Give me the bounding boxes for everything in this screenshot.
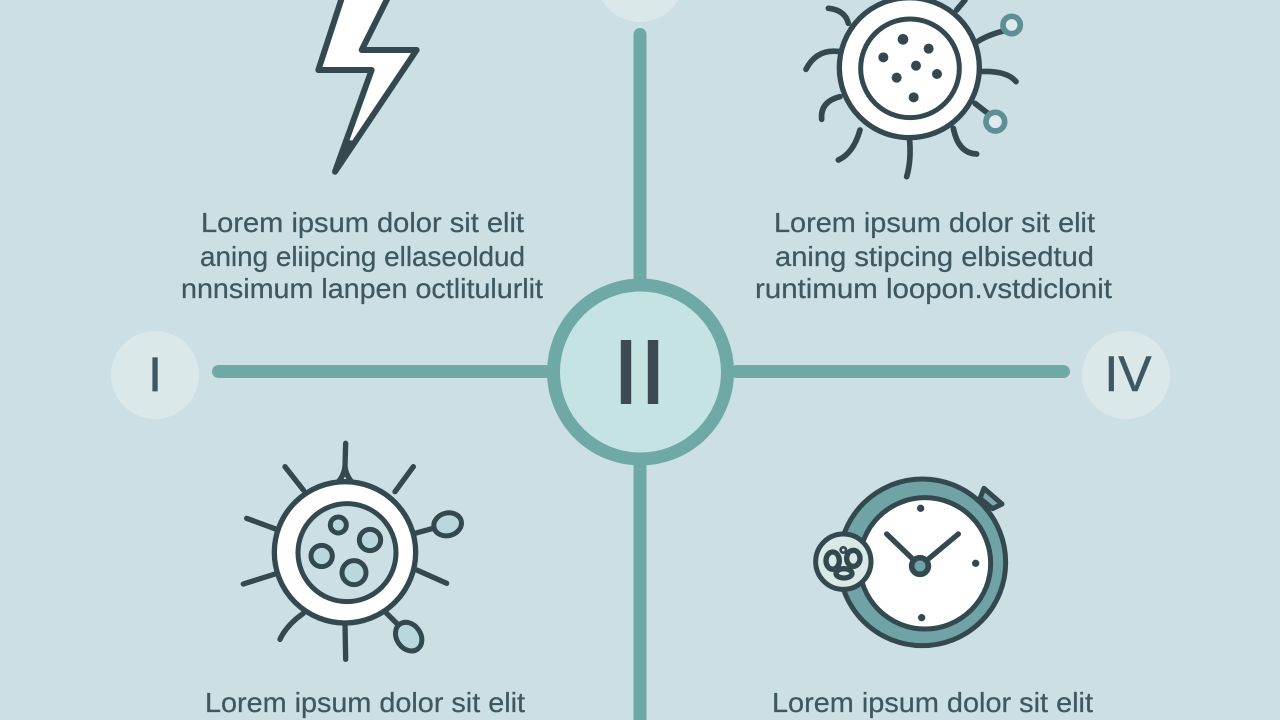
icon: cell with dots [806,0,1020,177]
numeral badge: IV: IV [1104,346,1152,402]
icon: cell with nuclei [243,443,464,659]
text block: top left: nnnsimum lanpen octlitulurlit [181,273,543,304]
icon: stopwatch clock [816,479,1006,646]
icon: lightning bolt [318,0,417,172]
text block: top right [755,207,1112,304]
text block: top right: Lorem ipsum dolor sit elit [774,207,1095,238]
numeral badge: top [596,0,684,22]
text block: top left: Lorem ipsum dolor sit elit [201,207,524,238]
text block: top right: runtimum loopon.vstdiclonit [755,273,1112,304]
text block: bottom right: Lorem ipsum dolor sit elit [772,687,1093,718]
text block: top left [181,207,543,304]
text block: top right: aning stipcing elbisedtud [775,241,1094,272]
text block: bottom left: Lorem ipsum dolor sit elit [205,687,525,718]
numeral badge: I [111,331,199,419]
numeral badge: I: I [148,349,162,402]
text block: top left: aning eliipcing ellaseoldud [200,241,525,272]
central hub: II [554,285,728,459]
cross connector lines [212,28,1070,720]
numeral badge: IV [1082,331,1170,419]
central hub: II: II [613,323,668,423]
